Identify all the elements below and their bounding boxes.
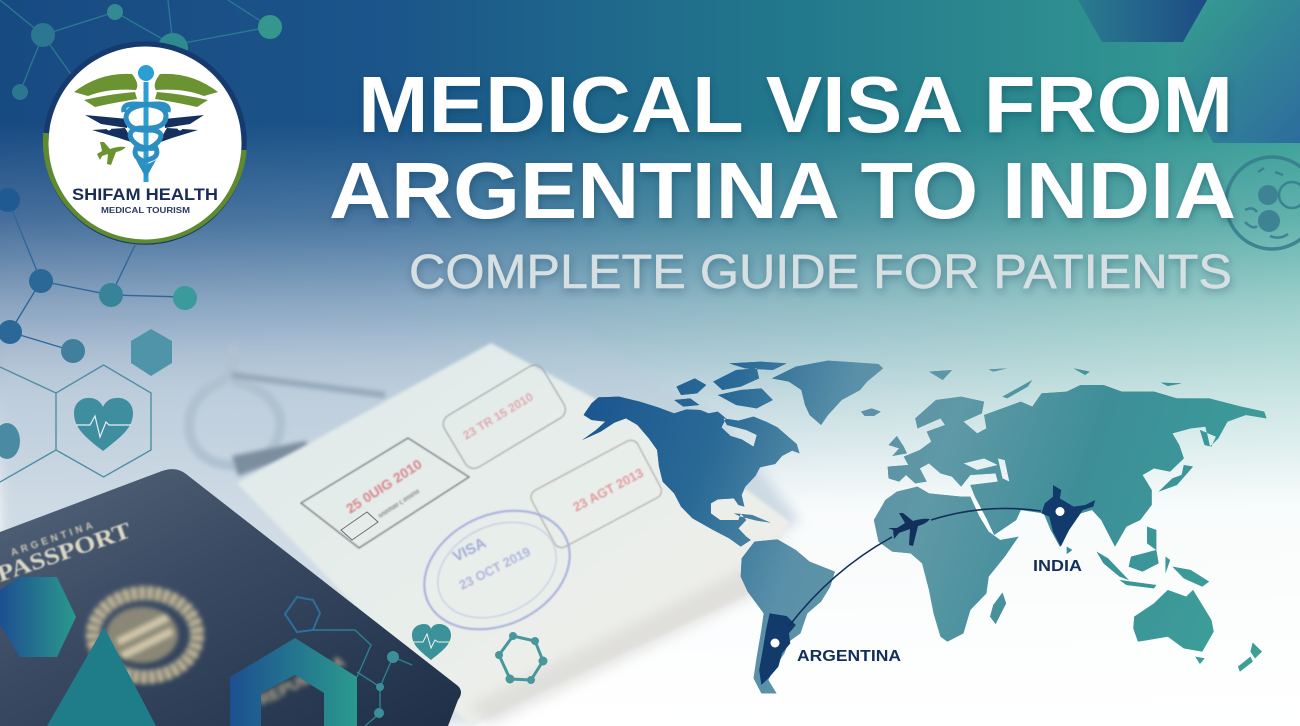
green wings [74,74,218,107]
decor: small filled hexagon [131,329,172,376]
round visa stamp: VISA [450,534,489,566]
round visa stamp: 23 OCT 2019 [457,544,533,593]
location pin: Argentina [770,638,780,648]
location pin: India [1056,507,1064,516]
label: Argentina: ARGENTINA [797,648,901,665]
photo: passport cover: REPUBLICA [256,653,348,710]
world map [582,361,1267,693]
snakes [124,104,168,162]
passport gold seal [93,593,197,677]
photo: blurred stethoscope [189,345,385,476]
title line 1: MEDICAL VISA FROM [358,60,1233,149]
decor: network molecule top-left [0,0,282,100]
passport stamp 3 [528,438,664,550]
logo ring [46,44,244,242]
round visa stamp [405,488,589,652]
title line 2: ARGENTINA TO INDIA [329,146,1236,235]
logo tagline: MEDICAL TOURISM [101,206,190,215]
navy aircraft wings [85,115,204,143]
decor: top right hexagons [1078,0,1300,143]
photo: open passport pages [237,343,790,726]
decor: outlined hexagons with heart [0,365,151,482]
passport stamp 1 [301,438,469,548]
icon: heart with pulse [74,398,133,451]
green plane icon [97,142,126,165]
decor: large hexagon frame [230,638,357,726]
subtitle: COMPLETE GUIDE FOR PATIENTS [409,246,1232,299]
icon: airplane [888,513,930,546]
photo: passport cover [0,469,461,726]
decor: small molecule lines [285,597,412,726]
title [329,60,1236,235]
decor: network molecule mid-left [0,188,197,363]
passport text: ARGENTINA [9,520,94,559]
passport stamp 3: 23 AGT 2013 [570,465,646,515]
Argentina highlighted [759,613,796,685]
icon: molecule ring on page [495,632,548,684]
passport stamp 1: ιντσιπασ ς σιτιστα [378,489,421,520]
logo badge [46,44,244,242]
passport stamp 2 [440,361,569,472]
decor: triangle [47,627,156,726]
icon: small heart on page [412,624,451,660]
decor: filled hexagon over passport [0,577,76,657]
icon: cell diagram [1226,157,1300,249]
passport stamp 2: 23 TR 15 2010 [460,390,536,443]
label: India: INDIA [1033,558,1082,575]
logo name: SHIFAM HEALTH [72,186,218,204]
India highlighted [1041,485,1095,547]
flight arc [789,508,1041,626]
photo backdrop [0,320,800,726]
logo caduceus emblem [74,65,218,182]
continents [582,361,1267,693]
passport stamp 1: 25 0UIG 2010 [343,456,425,517]
